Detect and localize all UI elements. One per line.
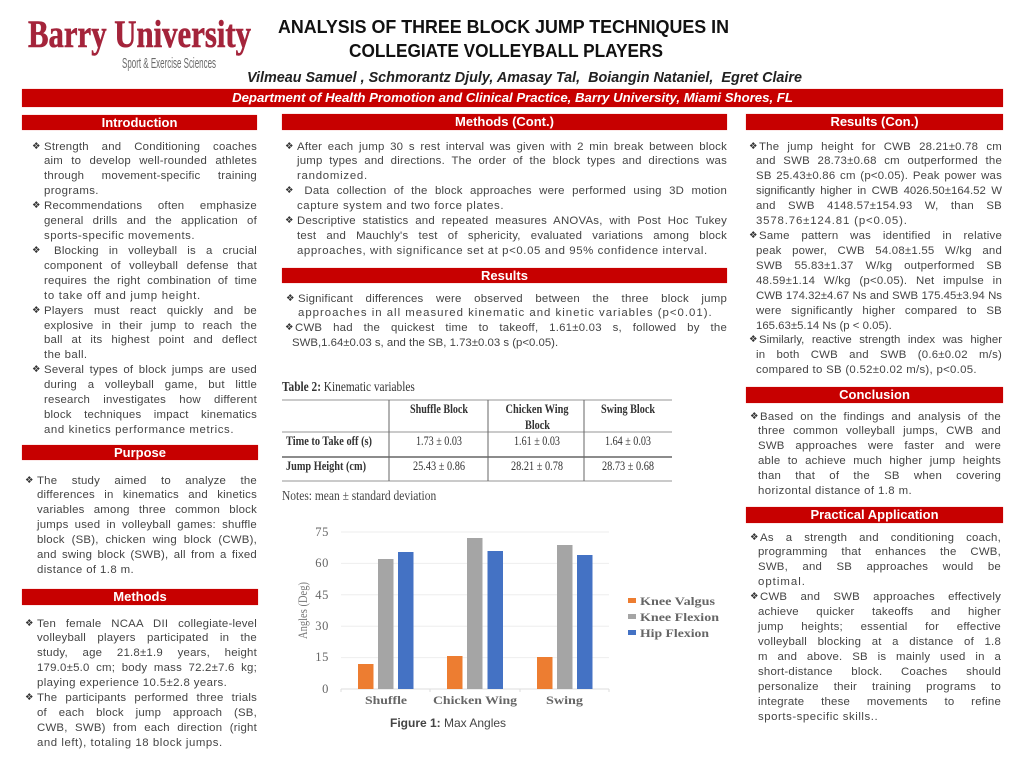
text: introduction bullets [32,140,257,436]
text: introduction bullets: Several types of block jumps are used [44,364,257,376]
text: results continued bullets: and SWB 4148.57±154.93 W, than SB [756,200,1002,212]
text: methods continued bullets: approaches, with significance set at p<0.05 and 95% confidence interval. [297,245,708,257]
text: introduction bullets: sports-specific movements. [44,230,195,242]
y axis labels: 60 [315,556,329,570]
heading: Methods: Methods [113,589,167,604]
heading: Methods (Cont.) [282,114,727,130]
text: methods continued bullets [285,140,727,257]
text: methods bullets: study, age 21.8±1.9 years, height [37,647,257,659]
text: ❖ [750,591,759,602]
title: ANALYSIS OF THREE BLOCK JUMP TECHNIQUES IN [278,17,729,37]
text: results continued bullets: 165.63±5.14 Ns (p < 0.05). [756,320,892,332]
y axis labels [315,525,329,696]
heading: Practical Application [746,507,1003,523]
text: introduction bullets: component of volleyball defense that [44,260,257,272]
table: kinematic variables: Swing Block [601,402,655,416]
text: conclusion bullet: Based on the findings and analysis of the [760,410,1001,422]
title [278,17,729,61]
text: methods continued bullets: capture system and two force plates. [297,200,504,212]
text: practical application bullets: integrate these movements to refine [758,696,1001,708]
y axis labels: 75 [315,525,329,539]
text: practical application bullets: optimal. [758,576,806,588]
table: kinematic variables: Jump Height (cm) [286,459,366,473]
text: results continued bullets: SB 25.43±0.86 cm (p<0.05). Peak power was [756,170,1002,182]
text: ❖ [750,532,759,542]
text: results continued bullets: peak power, CWB 54.08±1.55 W/kg and [756,245,1002,257]
title: COLLEGIATE VOLLEYBALL PLAYERS [349,41,663,61]
text: conclusion bullet: SWB approaches were faster and were [758,440,1001,452]
text: practical application bullets: achieve quicker takeoffs and higher [758,606,1001,618]
text: results continued bullets: CWB 174.32±4.67 Ns and SWB 175.45±3.94 Ns [756,290,1002,302]
figure caption: Figure 1: Max Angles [390,716,506,730]
text: introduction bullets: Strength and Conditioning coaches [44,140,257,152]
text: practical application bullets: m and above. SB is mainly used in a [758,651,1001,663]
text: introduction bullets: through movement-specific training [44,170,257,182]
text: methods continued bullets: jump types and directions. The order of the block types and directions was [297,155,727,167]
text: introduction bullets: block techniques impact kinematics [44,409,257,421]
text: practical application bullets: programming that enhances the CWB, [758,546,1001,558]
text: introduction bullets: aim to develop well-rounded athletes [44,155,257,167]
text: ❖ [25,474,34,486]
heading: Results: Results [481,268,528,283]
text: practical application bullets: As a strength and conditioning coach, [760,532,1001,544]
text: methods bullets: and left), totaling 18 block jumps. [37,737,223,749]
text: introduction bullets: to take off and jump height. [44,290,201,302]
text: ❖ [32,305,41,316]
y axis labels: 15 [315,650,329,664]
text: results continued bullets: The jump height for CWB 28.21±0.78 cm [759,140,1002,152]
text: introduction bullets: general drills and the application of [44,215,257,227]
heading: Methods (Cont.): Methods (Cont.) [455,114,554,129]
table: kinematic variables: 25.43 ± 0.86 [413,459,465,473]
text: introduction bullets: and kinetics performance metrics. [44,424,234,436]
table: kinematic variables: Block [525,418,550,432]
text: ❖ [749,140,758,152]
text: results bullets: approaches in all measured kinematic and kinetic variables (p<0.01). [298,307,713,319]
bar chart: max angles [296,525,720,707]
text: ❖ [285,322,294,333]
text: practical application bullets: volleyball blocking at a distance of 1.8 [758,636,1001,648]
text: introduction bullets: requires the right combination of time [44,275,257,287]
heading: Introduction: Introduction [102,115,177,130]
category labels: Swing [546,695,583,707]
text: ❖ [25,692,34,703]
legend: Hip Flexion [640,628,710,640]
text: conclusion bullet: able to achieve much higher jump heights [758,455,1001,467]
heading: Conclusion [746,387,1003,403]
category labels [365,695,583,707]
text: methods bullets [25,618,257,749]
text: introduction bullets: Players must react quickly and be [44,305,257,317]
heading: Methods [22,589,258,605]
text: methods bullets: of each block jump approach (SB, [37,707,257,719]
text: methods bullets: CWB, SWB) from each direction (right [37,722,257,734]
text: methods continued bullets: Descriptive statistics and repeated measures ANOVAs, with Post Hoc Tukey [297,215,727,227]
text: results continued bullets: were significantly higher compared to SB [756,305,1002,317]
text: results continued bullets: Similarly, reactive strength index was higher [759,334,1002,346]
department banner [22,89,1003,107]
table: kinematic variables: 28.21 ± 0.78 [511,459,563,473]
department banner: Department of Health Promotion and Clinical Practice, Barry University, Miami Shores, FL [232,90,793,105]
y axis labels: 30 [315,619,329,633]
table: kinematic variables: 1.64 ± 0.03 [605,434,651,448]
text: ❖ [749,334,758,345]
text: methods bullets: 179.0±5.0 cm; body mass 72.2±7.6 kg; [37,662,257,674]
y axis labels: 45 [315,588,329,602]
text: results continued bullets: compared to SB (0.52±0.02 m/s), p<0.05. [756,364,977,376]
text: results bullets [285,292,727,349]
heading: Conclusion: Conclusion [839,387,910,402]
text: ❖ [285,140,294,152]
text: ❖ [32,140,41,152]
text: results continued bullets [749,140,1002,376]
heading: Purpose: Purpose [114,445,166,460]
table: kinematic variables: Time to Take off (s) [286,434,372,448]
text: ❖ [32,245,41,256]
bars: hip flexion [398,551,592,689]
category labels: Chicken Wing [433,695,517,707]
text: methods bullets: volleyball players participated in the [37,632,257,644]
text: introduction bullets: the ball. [44,349,88,361]
text: purpose bullet: The study aimed to analyze the [37,474,257,486]
text: purpose bullet: differences in kinematics and kinetics [37,489,257,501]
heading: Results (Con.) [746,114,1003,130]
text: purpose bullet: block (SB), chicken wing block (CWB), [37,534,257,546]
text: methods bullets: The participants performed three trials [37,692,257,704]
text: ❖ [750,410,759,422]
text: ❖ [285,185,294,196]
text: conclusion bullet: than that of the SB when covering [758,470,1001,482]
y axis title: Angles (Deg) [296,582,310,639]
text: practical application bullets: sports-specific skills.. [758,711,878,723]
text: results continued bullets: and SWB 28.73±0.68 cm outperformed the [756,155,1002,167]
text: conclusion bullet [750,410,1001,497]
heading: Purpose [22,445,258,460]
text: introduction bullets: ball at its highest point and deflect [44,334,257,346]
text: purpose bullet: and swing block (SWB), all from a fixed [37,549,257,561]
text: purpose bullet: distance of 1.8 m. [37,564,134,576]
bars: knee valgus [358,656,552,689]
text: results continued bullets: significantly higher in CWB 4026.50±164.52 W [756,185,1002,197]
text: introduction bullets: programs. [44,185,99,197]
text: results continued bullets: SWB 55.83±1.37 W/kg outperformed SB [756,260,1002,272]
table: kinematic variables: Shuffle Block [410,402,468,416]
text: results continued bullets: Same pattern was identified in relative [759,230,1002,242]
table: kinematic variables: 28.73 ± 0.68 [602,459,654,473]
text: results continued bullets: in both CWB and SWB (0.6±0.02 m/s) [756,349,1002,361]
authors: Vilmeau Samuel , Schmorantz Djuly, Amasay Tal, Boiangin Nataniel, Egret Claire [247,70,802,86]
text: introduction bullets: Blocking in volleyball is a crucial [54,245,257,257]
text: methods bullets: playing experience 10.5±2.8 years. [37,677,227,689]
text: conclusion bullet: horizontal distance of 1.8 m. [758,485,912,497]
table title: Table 2: Kinematic variables [282,379,415,394]
bars: knee flexion [378,538,572,689]
category labels: Shuffle [365,695,407,707]
text: practical application bullets: personalize their training programs to [758,681,1001,693]
text: practical application bullets: SWB, and SB approaches would be [758,561,1001,573]
text: purpose bullet: jumps used in volleyball games: shuffle [37,519,257,531]
text: ❖ [286,292,295,304]
legend: Knee Valgus [640,596,716,608]
table: kinematic variables: Chicken Wing [506,402,569,416]
table notes: Notes: mean ± standard deviation [282,489,436,504]
heading: Results [282,268,727,283]
text: methods continued bullets: test and Mauchly's test of sphericity, evaluated variations among block [297,230,727,242]
table: kinematic variables: 1.73 ± 0.03 [416,434,462,448]
text: results bullets: SWB,1.64±0.03 s, and the SB, 1.73±0.03 s (p<0.05). [292,337,558,349]
text: ❖ [749,230,758,241]
text: ❖ [32,200,41,211]
y axis labels: 0 [322,682,329,696]
legend [628,596,720,640]
text: practical application bullets: CWB and SWB approaches effectively [760,591,1001,603]
text: introduction bullets: Recommendations often emphasize [44,200,257,212]
text: results continued bullets: 3578.76±124.81 (p<0.05). [756,215,908,227]
text: purpose bullet: variables among three common block [37,504,257,516]
heading: Introduction [22,115,257,130]
legend: Knee Flexion [640,612,720,624]
text: practical application bullets: short-distance block. Coaches should [758,666,1001,678]
text: results bullets: Significant differences were observed between the three block jump [298,292,727,304]
text: methods continued bullets: Data collection of the block approaches were performed using 3D motion [304,185,727,197]
text: practical application bullets [750,532,1001,723]
text: practical application bullets: jump heights; essential for effective [758,621,1001,633]
text: results bullets: CWB had the quickest time to takeoff, 1.61±0.03 s, followed by the [295,322,727,334]
text: conclusion bullet: three common volleyball jumps, CWB and [758,425,1001,437]
text: introduction bullets: during a volleyball game, but little [44,379,257,391]
text: purpose bullet [25,474,257,576]
heading: Results (Con.): Results (Con.) [830,114,919,129]
text: introduction bullets: explosive in their jump to reach the [44,320,257,332]
text: methods continued bullets: After each jump 30 s rest interval was given with 2 min break between block [297,140,727,152]
table: kinematic variables: 1.61 ± 0.03 [514,434,560,448]
text: introduction bullets: research investigates how different [44,394,257,406]
text: ❖ [32,364,41,375]
text: ❖ [25,618,34,628]
table: kinematic variables [282,399,672,482]
text: ❖ [285,215,294,226]
text: results continued bullets: 48.59±1.14 W/kg (p<0.05). Net impulse in [756,275,1002,287]
text: methods bullets: Ten female NCAA DII collegiate-level [37,618,257,630]
heading: Practical Application: Practical Application [810,507,939,522]
text: methods continued bullets: randomized. [297,170,368,182]
